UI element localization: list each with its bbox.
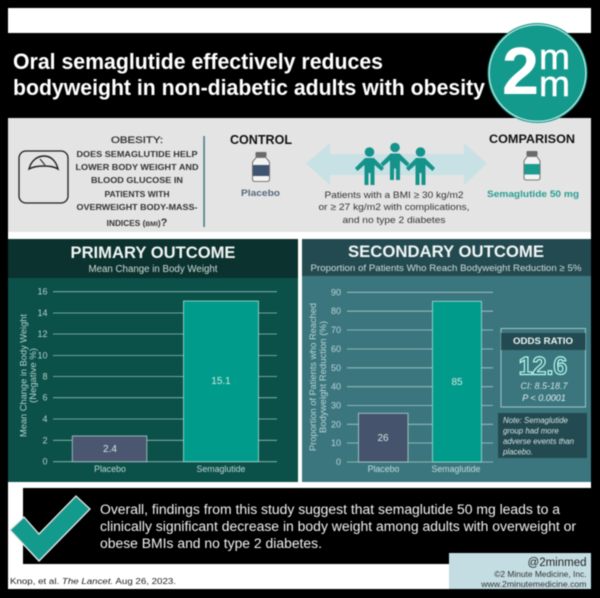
callout: adverse events note: Note: Semaglutide [503,416,569,425]
bar chart: mean change in body weight: 6 [42,393,48,403]
population description [318,189,470,225]
title banner: bodyweight in non-diabetic adults with obesity [13,75,486,100]
bar chart: proportion reaching reduction: 0 [336,457,341,467]
bar chart: mean change in body weight: 2 [42,435,48,445]
panel: conclusion: obese BMIs and no type 2 diabetes. [100,536,322,552]
research question: DOES SEMAGLUTIDE HELP [76,149,198,159]
secondary heading: SECONDARY OUTCOME [348,243,544,261]
y axis title: Proportion of Patients who Reached [308,303,319,451]
bar chart: proportion reaching reduction: 50 [331,363,341,373]
bar chart: mean change in body weight: 8 [42,372,48,382]
panel: secondary outcome [302,239,591,482]
primary heading: Mean Change in Body Weight [88,264,218,275]
bar chart: proportion reaching reduction: 70 [331,325,341,335]
placebo label: Placebo [241,188,280,199]
divider [203,136,205,227]
citation: Knop, et al. The Lancet. Aug 26, 2023. [10,576,176,586]
y axis title [308,303,329,451]
arrow: double-headed population arrow [306,143,487,185]
bar chart: proportion reaching reduction: 20 [331,419,341,429]
logo: 2 Minute Medicine: m [539,36,570,77]
title banner [8,33,591,118]
bar chart: mean change in body weight: 0 [42,457,48,467]
population description: Patients with a BMI ≥ 30 kg/m2 [324,189,464,200]
bar chart: mean change in body weight [18,287,277,474]
callout: odds ratio [501,328,586,407]
y axis title: (Negative %) [28,348,39,403]
bar chart: proportion reaching reduction: 60 [331,344,341,354]
callout: odds ratio: ODDS RATIO [513,336,573,346]
credit box: ©2 Minute Medicine, Inc. [494,569,586,579]
panel: conclusion: clinically significant decrease in body weight among adults with overweight or [100,519,576,535]
semaglutide label: Semaglutide 50 mg [487,189,579,200]
research question: LOWER BODY WEIGHT AND [76,162,199,172]
icon: weighing scale [19,151,68,203]
research question: INDICES (BMI)? [107,217,168,229]
logo: 2 Minute Medicine: 2 [502,34,539,109]
bar chart: proportion reaching reduction: 85 [451,377,463,388]
y axis title: Mean Change in Body Weight [18,314,30,437]
bar chart: mean change in body weight: 10 [37,350,48,360]
bar chart: proportion reaching reduction: 80 [331,306,341,316]
bar chart: proportion reaching reduction: Placebo [368,464,399,474]
callout: odds ratio: P < 0.0001 [522,393,566,403]
icon: placebo bottle [252,152,270,182]
comparison heading: COMPARISON [489,132,575,146]
credit box: www.2minutemedicine.com [480,579,586,589]
credit box: @2minmed [528,557,586,569]
logo: 2 Minute Medicine: m [539,63,570,104]
callout: adverse events note [498,413,587,458]
bar chart: mean change in body weight: 15.1 [211,376,231,387]
research question: OVERWEIGHT BODY-MASS- [76,202,198,212]
bar chart: mean change in body weight: 2.4 [103,444,117,455]
icon: three patients [355,143,435,185]
secondary heading: Proportion of Patients Who Reach Bodyweight Reduction ≥ 5% [310,263,582,274]
y axis title [18,314,39,437]
research question [76,135,199,229]
panel: conclusion: Overall, findings from this study suggest that semaglutide 50 mg leads to a [100,502,560,518]
bar chart: mean change in body weight: 16 [37,287,48,297]
panel: primary outcome [8,239,298,482]
title banner: Oral semaglutide effectively reduces [13,49,383,74]
bar chart: proportion reaching reduction: 10 [331,438,341,448]
icon: semaglutide bottle [524,151,540,180]
bar chart: proportion reaching reduction: 40 [331,382,341,392]
bar: placebo [72,436,147,462]
research question: OBESITY: [111,135,163,146]
bar: semaglutide [184,301,258,462]
bar chart: mean change in body weight: 4 [42,414,48,424]
panel: study design [8,118,591,232]
primary heading [8,239,298,278]
population description: and no type 2 diabetes [342,214,446,225]
bar chart: proportion reaching reduction [308,287,493,474]
bar: semaglutide [432,301,482,462]
panel: conclusion [23,488,591,564]
y axis title: Bodyweight Reduction (%) [318,321,329,433]
callout: odds ratio: 12.6 [519,352,567,380]
logo: 2 Minute Medicine [488,23,588,123]
bar: placebo [358,413,408,462]
bar chart: mean change in body weight: 14 [37,308,48,318]
bar chart: proportion reaching reduction: Semaglutide [432,464,481,474]
callout: adverse events note: group had more [503,426,559,436]
bar chart: proportion reaching reduction: 90 [331,287,341,297]
bar chart: mean change in body weight: Placebo [94,464,126,474]
callout: adverse events note: adverse events than [503,437,575,446]
primary heading: PRIMARY OUTCOME [70,244,236,262]
secondary heading [302,239,591,276]
icon: check mark [10,496,90,561]
bar chart: proportion reaching reduction: 30 [331,400,341,410]
callout: odds ratio: CI: 8.5-18.7 [520,381,569,391]
research question: BLOOD GLUCOSE IN [91,175,183,185]
population description: or ≥ 27 kg/m2 with complications, [318,201,470,212]
bar chart: proportion reaching reduction: 26 [377,433,389,444]
credit box [449,553,591,589]
control heading: CONTROL [230,133,292,147]
callout: adverse events note: placebo. [502,448,533,456]
research question: PATIENTS WITH [104,189,170,199]
bar chart: mean change in body weight: Semaglutide [197,464,246,474]
bar chart: mean change in body weight: 12 [37,329,48,339]
